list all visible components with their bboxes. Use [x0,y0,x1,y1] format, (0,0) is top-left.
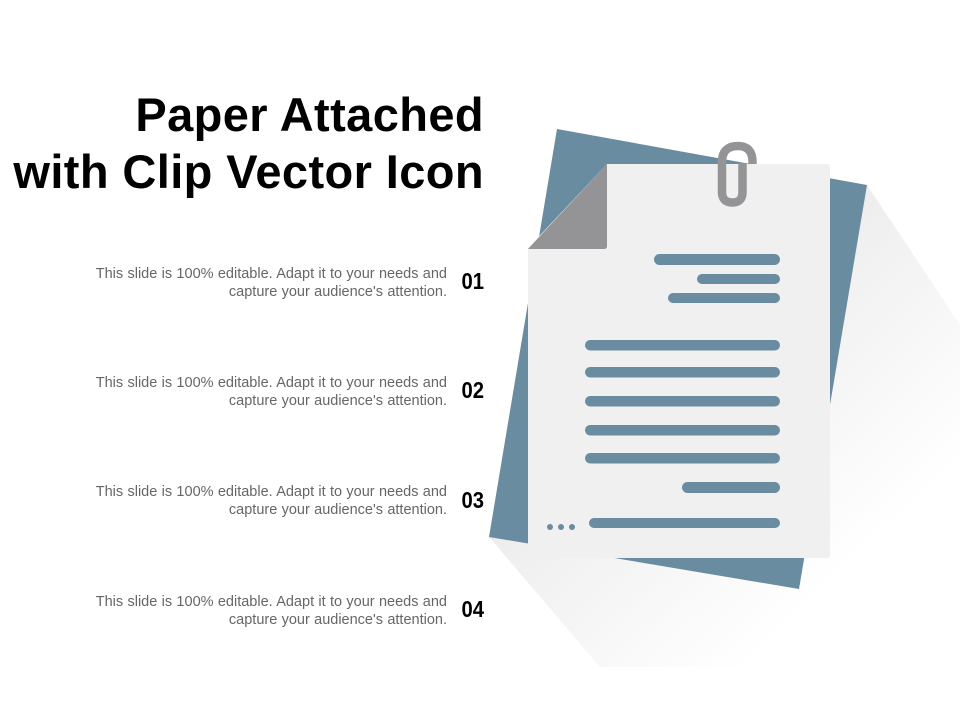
text block 4 [96,594,447,628]
title [13,88,484,198]
front sheet [528,164,830,558]
text block 2: capture your audience's attention. [229,393,447,409]
title: Paper Attached [135,88,484,141]
text block 2 [96,375,447,409]
title: with Clip Vector Icon [13,145,484,198]
text block 4: capture your audience's attention. [229,612,447,628]
text block 2: This slide is 100% editable. Adapt it to your needs and [96,375,447,391]
text lines [547,254,780,530]
text block 1 [96,266,447,300]
text block 1: This slide is 100% editable. Adapt it to your needs and [96,266,447,282]
back sheet [489,129,867,589]
text block 1: capture your audience's attention. [229,284,447,300]
text block 3: capture your audience's attention. [229,502,447,518]
number 04: 04 [461,596,484,622]
number 02: 02 [461,377,484,403]
folded corner [528,164,607,249]
text block 4: This slide is 100% editable. Adapt it to your needs and [96,594,447,610]
long shadow [489,185,960,667]
number 01: 01 [461,268,484,294]
paper clip back [722,146,752,165]
number 03: 03 [461,487,484,513]
text block 3 [96,484,447,518]
text block 3: This slide is 100% editable. Adapt it to your needs and [96,484,447,500]
paper clip front [722,160,742,202]
